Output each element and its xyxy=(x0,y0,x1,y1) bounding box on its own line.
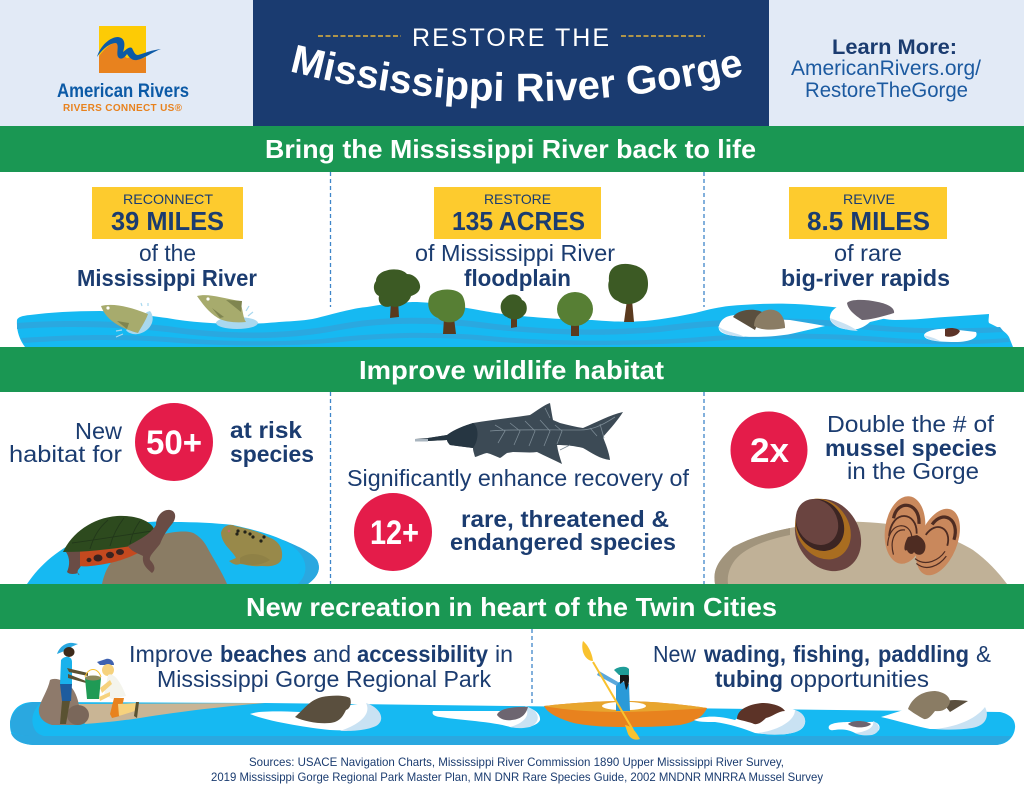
icon: rock and foam 4 xyxy=(829,721,880,735)
text: beaches and accessibility: accessibility xyxy=(357,641,488,667)
section banner: recreation: New recreation in heart of the Twin Cities xyxy=(246,592,777,622)
beach xyxy=(75,703,265,724)
stat: 39 miles: Mississippi River xyxy=(77,265,257,291)
text: beaches and accessibility: and xyxy=(313,641,351,667)
stat: 135 acres: floodplain xyxy=(464,265,571,291)
title: Mississippi River Gorge: Mississippi River Gorge xyxy=(292,45,742,108)
icon: rock and foam 3 xyxy=(694,703,805,735)
stat: 39 miles: of the xyxy=(139,240,196,266)
text: wading, fishing, paddling: paddling xyxy=(878,641,969,667)
text: wading, fishing, paddling: wading, xyxy=(703,641,786,667)
icon: open mussel xyxy=(880,494,969,582)
sources xyxy=(211,755,823,784)
text: wading, fishing, paddling: New xyxy=(653,641,696,667)
icon: rock and foam 5 xyxy=(881,691,987,730)
icon: kayak with paddler xyxy=(544,641,707,740)
sources: Sources: USACE Navigation Charts, Mississippi River Commission 1890 Upper Mississippi River Survey, xyxy=(249,755,784,769)
section banner: recreation xyxy=(0,584,1024,629)
stat: double mussel species: mussel species xyxy=(825,435,997,461)
text: beaches and accessibility xyxy=(129,641,513,692)
text: beaches and accessibility: Improve xyxy=(129,641,213,667)
icon: frog xyxy=(221,525,282,566)
text: wading, fishing, paddling: & xyxy=(976,641,991,667)
stat: double mussel species: in the Gorge xyxy=(847,458,979,484)
icon: rocks under figures xyxy=(39,679,89,725)
stat: 8.5 miles: REVIVE xyxy=(843,191,895,207)
section banner: river: Bring the Mississippi River back to life xyxy=(265,134,756,164)
icon: closed mussel xyxy=(782,486,874,584)
icon: turtle xyxy=(63,510,175,575)
stat: double mussel species: Double the # of xyxy=(827,411,995,437)
stat: 12+ species: 12+ xyxy=(370,514,419,552)
learn more url: AmericanRivers.org/ xyxy=(791,57,981,80)
text: wading, fishing, paddling xyxy=(653,641,991,692)
icon: trees xyxy=(374,264,648,336)
section banner: wildlife xyxy=(0,347,1024,392)
icon: American Rivers logo mark xyxy=(97,26,161,73)
stat: 135 acres: RESTORE xyxy=(484,191,551,207)
learn more url line 2: RestoreTheGorge xyxy=(805,79,968,102)
stat: 8.5 miles: of rare xyxy=(834,240,902,266)
text: wading, fishing, paddling: opportunities xyxy=(790,666,929,692)
header panel: learn more xyxy=(769,0,1024,126)
stat: 39 miles: 39 MILES xyxy=(111,206,224,236)
stat: double mussel species: 2x xyxy=(750,432,789,470)
illustration: recreation river xyxy=(10,641,1015,745)
icon: fish jumping right xyxy=(197,295,258,329)
illustration: turtle and frog on rock xyxy=(27,510,319,584)
stat: 12+ species xyxy=(354,493,676,571)
stat: 50+ species: at risk xyxy=(230,417,302,443)
stat: 12+ species: rare, threatened & xyxy=(461,506,669,532)
river illustration xyxy=(17,264,1013,347)
section banner: river xyxy=(0,126,1024,172)
icon: paddlefish xyxy=(415,403,623,464)
icon: rock and foam 1 xyxy=(250,696,381,731)
stat: 12+ species: endangered species xyxy=(450,529,676,555)
illustration: mussels on rock xyxy=(714,486,1007,584)
text: beaches and accessibility: in xyxy=(495,641,513,667)
title: restore the: RESTORE THE xyxy=(412,24,609,52)
text: beaches and accessibility: beaches xyxy=(220,641,307,667)
icon: rapids rocks xyxy=(718,300,977,342)
stat: 50+ species xyxy=(9,403,314,481)
section banner: wildlife: Improve wildlife habitat xyxy=(359,355,664,385)
header panel: logo xyxy=(0,0,253,126)
stat: 135 acres xyxy=(415,187,615,291)
icon: fish jumping left xyxy=(101,303,153,337)
stat: 39 miles xyxy=(77,187,257,291)
icon: rock and foam 2 xyxy=(433,706,540,728)
stat: 8.5 miles: 8.5 MILES xyxy=(807,206,930,236)
sources: 2019 Mississippi Gorge Regional Park Master Plan, MN DNR Rare Species Guide, 2002 MNDNR MNRRA Mussel Survey xyxy=(211,770,823,784)
stat: 39 miles: RECONNECT xyxy=(123,191,213,207)
stat: 8.5 miles xyxy=(781,187,950,291)
icon: person standing with bucket xyxy=(57,643,88,724)
text: significantly enhance recovery: Significantly enhance recovery of xyxy=(347,465,690,491)
icon: child sitting xyxy=(97,659,139,718)
stat: 50+ species: 50+ xyxy=(146,424,202,462)
stat: double mussel species xyxy=(730,411,997,488)
stat: 50+ species: species xyxy=(230,441,314,467)
header panel: title xyxy=(253,0,769,126)
stat: 135 acres: of Mississippi River xyxy=(415,240,615,266)
logo wordmark: American Rivers xyxy=(57,81,189,102)
text: beaches and accessibility: Mississippi Gorge Regional Park xyxy=(157,666,491,692)
learn more heading: Learn More: xyxy=(832,36,957,59)
logo tagline: RIVERS CONNECT US® xyxy=(63,103,183,114)
icon: bucket xyxy=(85,670,101,699)
stat: 135 acres: 135 ACRES xyxy=(452,206,585,236)
stat: 50+ species: habitat for xyxy=(9,441,122,467)
stat: 8.5 miles: big-river rapids xyxy=(781,265,950,291)
text: wading, fishing, paddling: fishing, xyxy=(793,641,870,667)
text: wading, fishing, paddling: tubing xyxy=(715,666,783,692)
stat: 50+ species: New xyxy=(75,418,122,444)
